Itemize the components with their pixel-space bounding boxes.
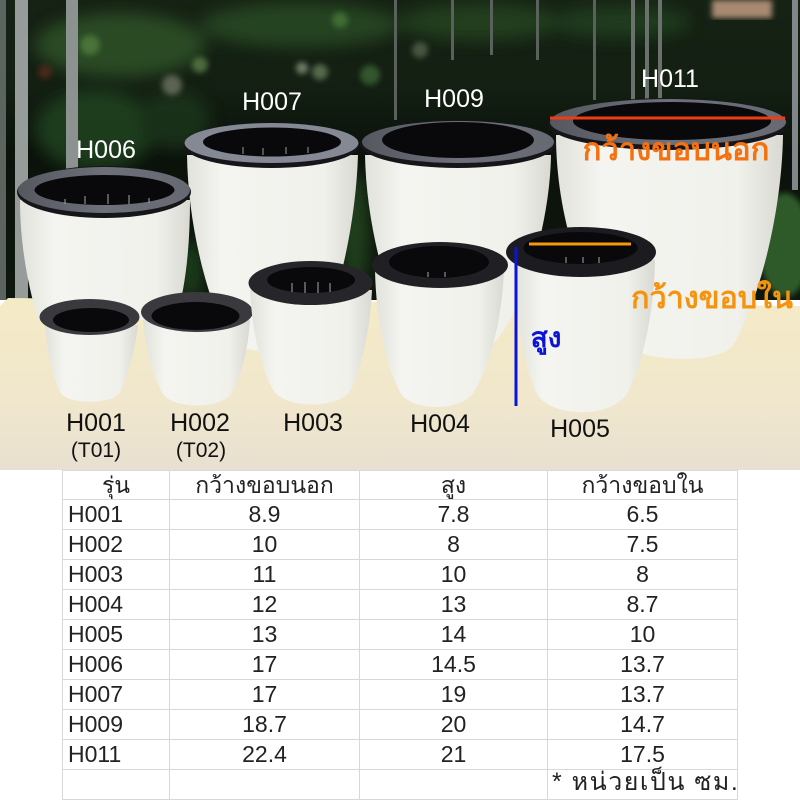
- row H011: 21: [441, 741, 466, 767]
- row H009: 18.7: [242, 711, 287, 737]
- row H005: 14: [441, 621, 466, 647]
- row H005: H005: [68, 621, 123, 647]
- header row: รุ่น: [102, 472, 130, 498]
- row H007: [62, 680, 738, 710]
- measure line: height: [514, 247, 518, 406]
- row H003: 11: [253, 561, 276, 587]
- header row: กว้างขอบนอก: [195, 472, 334, 498]
- pot labels: upper row: H006: [76, 136, 136, 164]
- pot H006: [17, 166, 191, 320]
- pot labels: upper row: H011: [641, 65, 699, 93]
- pot labels: lower row: H001: [66, 409, 126, 437]
- row H007: H007: [68, 681, 123, 707]
- pot H002: [141, 292, 253, 406]
- row H001: 6.5: [626, 501, 658, 527]
- pot labels: lower row: H002: [170, 409, 230, 437]
- row H002: 8: [447, 531, 460, 557]
- row H001: 7.8: [438, 501, 469, 527]
- row H004: 12: [252, 591, 277, 617]
- pot labels: upper row: H007: [242, 88, 302, 116]
- pot H003: [248, 261, 372, 404]
- pot H009: [360, 120, 556, 348]
- row H011: 22.4: [242, 741, 287, 767]
- row H003: 10: [441, 561, 466, 587]
- footnote row: unit note: [62, 766, 739, 800]
- table: pot sizes: [62, 470, 739, 800]
- row H007: 17: [252, 681, 277, 707]
- background: table top: [0, 298, 800, 470]
- pot H005: [506, 227, 656, 412]
- row H003: H003: [68, 561, 123, 587]
- row H004: 8.7: [626, 591, 658, 617]
- row H004: [62, 590, 738, 620]
- row H002: H002: [68, 531, 123, 557]
- measure line: inner rim: [529, 242, 631, 246]
- row H006: H006: [68, 651, 123, 677]
- footnote row: unit note: * หน่วยเป็น ซม.: [552, 768, 739, 796]
- pot labels: lower row: H004: [410, 410, 470, 438]
- pot labels: lower row: [66, 409, 610, 462]
- row H001: 8.9: [248, 501, 280, 527]
- row H002: 7.5: [626, 531, 658, 557]
- pot H007: [184, 122, 360, 351]
- row H007: 13.7: [620, 681, 665, 707]
- product photo with pots: [0, 0, 800, 470]
- header row: [62, 470, 738, 500]
- pot labels: lower row: (T01): [71, 439, 121, 462]
- row H006: [62, 650, 738, 680]
- row H009: 20: [441, 711, 466, 737]
- row H002: [62, 530, 738, 560]
- measure line: outer rim: [550, 116, 785, 120]
- pot H004: [372, 242, 508, 407]
- header row: กว้างขอบใน: [581, 472, 704, 498]
- label: inner rim width: กว้างขอบใน: [631, 280, 793, 315]
- pot labels: upper row: [76, 65, 699, 164]
- row H001: [62, 500, 738, 530]
- row H004: 13: [441, 591, 466, 617]
- row H007: 19: [441, 681, 466, 707]
- pot H001: [40, 299, 140, 402]
- background: greenhouse foliage: [0, 0, 800, 300]
- label: outer rim width: กว้างขอบนอก: [583, 132, 769, 167]
- label: height: สูง: [531, 322, 561, 355]
- row H006: 14.5: [431, 651, 476, 677]
- pot H011: [548, 98, 788, 359]
- row H009: 14.7: [620, 711, 665, 737]
- header row: สูง: [441, 472, 466, 498]
- pot labels: upper row: H009: [424, 85, 484, 113]
- row H003: 8: [636, 561, 649, 587]
- pot labels: lower row: H003: [283, 409, 343, 437]
- row H004: H004: [68, 591, 123, 617]
- row H001: H001: [68, 501, 123, 527]
- row H011: 17.5: [620, 741, 665, 767]
- row H011: H011: [68, 741, 121, 767]
- row H002: 10: [252, 531, 277, 557]
- row H006: 17: [252, 651, 277, 677]
- pot labels: lower row: (T02): [176, 439, 226, 462]
- row H005: [62, 620, 738, 650]
- row H011: [62, 740, 738, 770]
- row H009: [62, 710, 738, 740]
- row H005: 13: [252, 621, 277, 647]
- row H006: 13.7: [620, 651, 665, 677]
- row H009: H009: [68, 711, 123, 737]
- pot labels: lower row: H005: [550, 415, 610, 443]
- row H003: [62, 560, 738, 590]
- row H005: 10: [630, 621, 655, 647]
